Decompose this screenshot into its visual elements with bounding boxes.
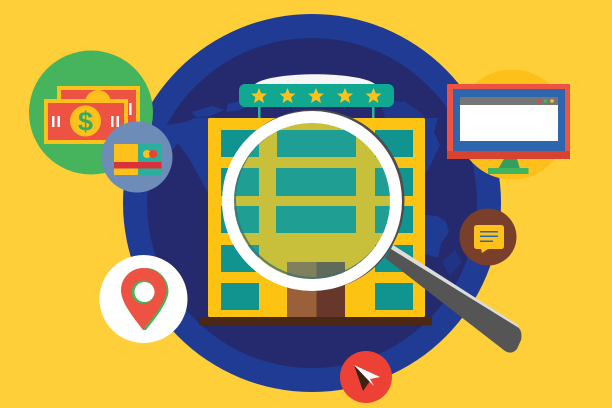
white circle [100, 255, 188, 343]
back banknote [57, 86, 140, 136]
monitor stand [498, 159, 520, 169]
sign posts [258, 107, 374, 119]
brown circle [460, 208, 516, 266]
green circle [29, 50, 153, 174]
stars [251, 88, 382, 103]
hotel building [199, 74, 432, 326]
panel: credit card circle [102, 122, 172, 192]
door [287, 262, 345, 317]
lens ring [222, 111, 402, 291]
panel: map pin circle [100, 255, 188, 343]
monitor frame [447, 84, 570, 159]
globe continents [140, 99, 462, 276]
windows [221, 130, 413, 310]
sign dome [255, 74, 375, 84]
yellow circle [457, 70, 567, 180]
panel: cursor circle [340, 351, 392, 403]
cursor arrow [354, 365, 380, 391]
panel: chat circle [460, 208, 516, 266]
card [114, 144, 162, 175]
lens rim shadow [224, 110, 404, 290]
slate circle [102, 122, 172, 192]
globe [123, 14, 501, 392]
lens glass view [234, 123, 390, 279]
magnifying glass [221, 110, 522, 353]
panel: money circle [29, 50, 153, 174]
ground base [199, 317, 432, 326]
dollar sign: $ [78, 106, 93, 136]
lens inner edge shadow [235, 121, 392, 278]
red circle [340, 351, 392, 403]
globe outer ring [123, 14, 501, 392]
rating sign [239, 84, 394, 107]
map pin [121, 268, 169, 330]
speech bubble [474, 225, 504, 253]
monitor screen [453, 89, 565, 151]
panel: monitor [447, 70, 570, 180]
browser window [460, 97, 558, 141]
coin [70, 106, 101, 136]
monitor base [488, 168, 528, 174]
building facade [208, 118, 425, 317]
globe inner disc [147, 38, 477, 368]
handle [385, 245, 522, 353]
